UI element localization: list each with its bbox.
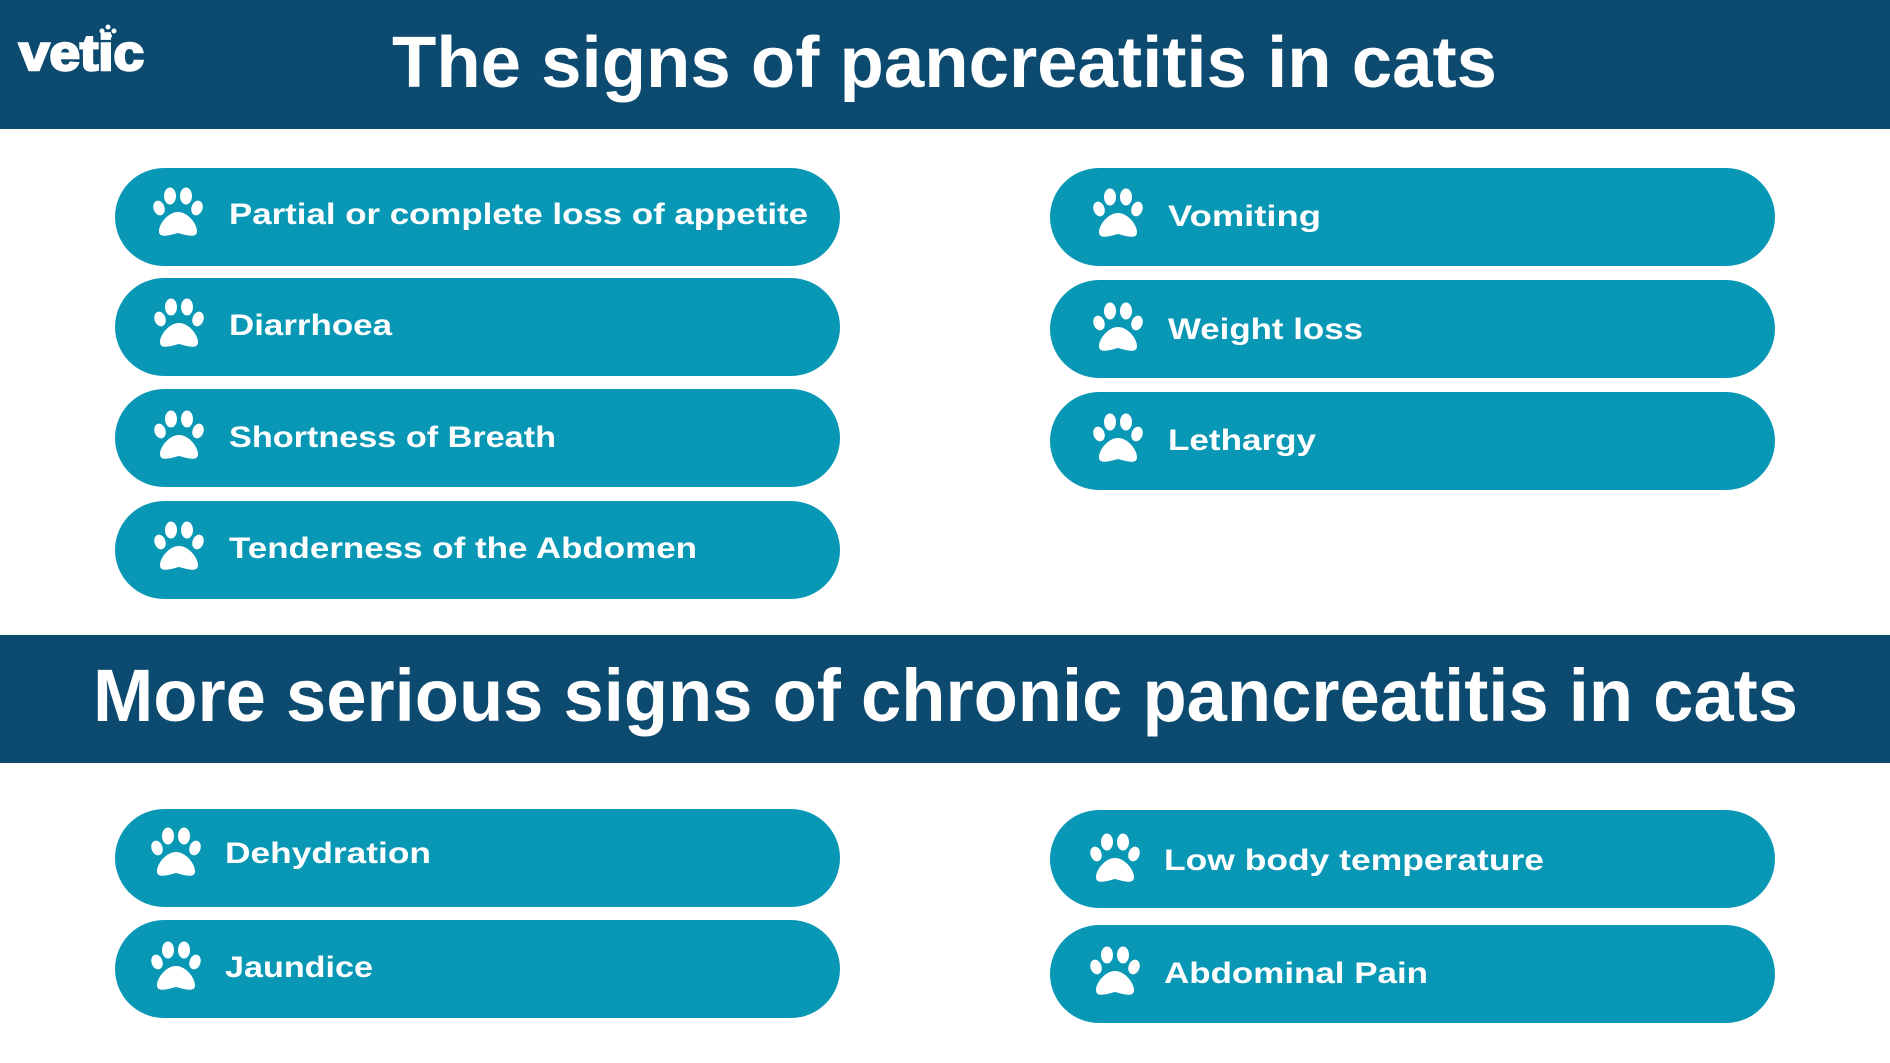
section bar: serious signs xyxy=(0,635,1890,763)
pill: weight loss xyxy=(1050,280,1775,378)
pill: low body temperature: Low body temperature xyxy=(1164,844,1544,877)
pill: weight loss: Weight loss xyxy=(1168,313,1363,346)
panel: common signs right column xyxy=(1050,168,1775,490)
logo: vetic: vetic xyxy=(19,25,144,81)
pill: appetite: Partial or complete loss of appetite xyxy=(229,198,808,231)
pill: lethargy: Lethargy xyxy=(1168,424,1316,457)
pill: dehydration xyxy=(115,809,840,907)
pill: vomiting: Vomiting xyxy=(1168,200,1321,233)
pill: diarrhoea: Diarrhoea xyxy=(229,309,392,342)
panel: common signs left column xyxy=(115,168,840,599)
header bar xyxy=(0,0,1890,129)
pill: diarrhoea xyxy=(115,278,840,376)
pill: jaundice xyxy=(115,920,840,1018)
pill: jaundice: Jaundice xyxy=(225,951,373,984)
pill: dehydration: Dehydration xyxy=(225,837,431,870)
pill: tenderness xyxy=(115,501,840,599)
pill: shortness of breath: Shortness of Breath xyxy=(229,421,556,454)
pill: shortness of breath xyxy=(115,389,840,487)
pill: vomiting xyxy=(1050,168,1775,266)
panel: serious signs left column xyxy=(115,809,840,1018)
pill: abdominal pain: Abdominal Pain xyxy=(1164,957,1428,990)
title: The signs of pancreatitis in cats xyxy=(392,23,1497,103)
pill: lethargy xyxy=(1050,392,1775,490)
pill: tenderness: Tenderness of the Abdomen xyxy=(229,532,697,565)
section heading: More serious signs of chronic pancreatitis in cats xyxy=(93,654,1798,737)
pill: low body temperature xyxy=(1050,810,1775,908)
pill: appetite xyxy=(115,168,840,266)
pill: abdominal pain xyxy=(1050,925,1775,1023)
panel: serious signs right column xyxy=(1050,810,1775,1023)
